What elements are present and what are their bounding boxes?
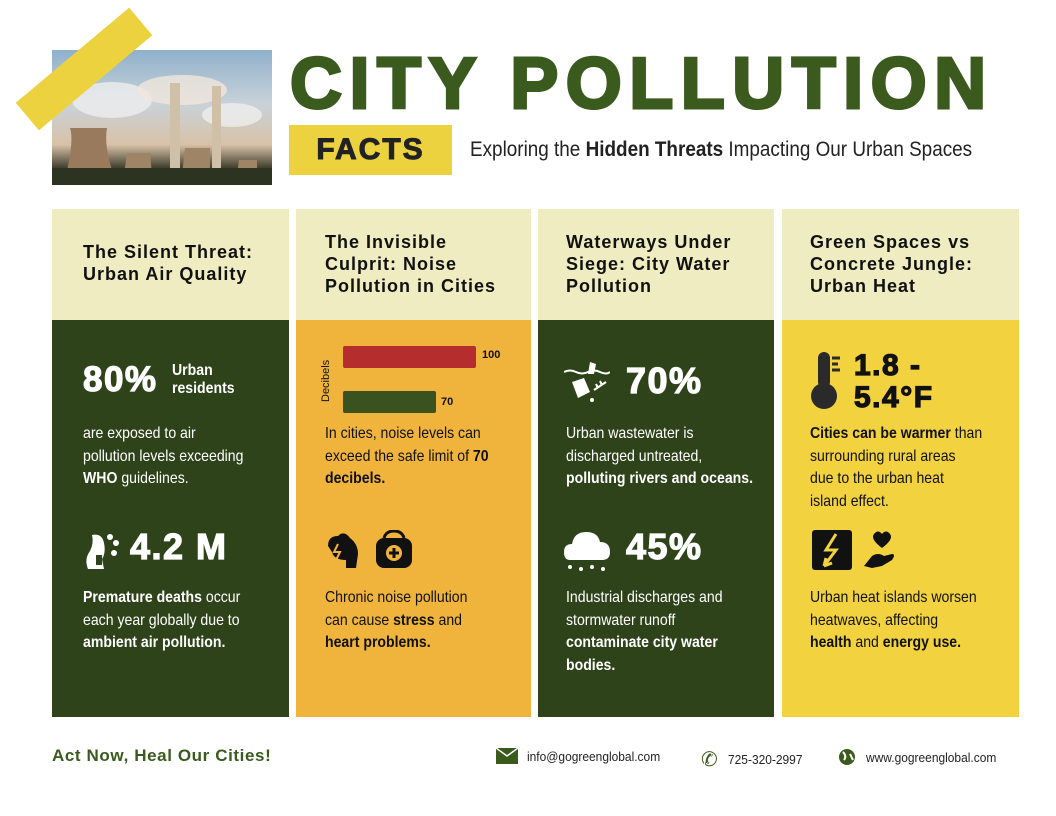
panel: water: polluting rivers and oceans. xyxy=(566,470,753,487)
panel: air quality: Urban Air Quality xyxy=(83,264,247,284)
photo: power plant xyxy=(52,50,272,185)
panel: heat: health and energy use. xyxy=(810,634,961,651)
panel: heat: surrounding rural areas xyxy=(810,448,956,464)
bar chart: Decibels xyxy=(320,360,332,402)
panel: water xyxy=(538,209,774,717)
panel: noise: Chronic noise pollution can cause stress and heart problems. xyxy=(325,589,467,651)
footer: email: info@gogreenglobal.com xyxy=(527,748,660,764)
text: are exposed to air pollution levels exceeding WHO guidelines. xyxy=(83,425,243,487)
panel: heat: Urban Heat xyxy=(810,276,916,296)
stat 80%: residents xyxy=(172,380,234,397)
panel: water: Industrial discharges and stormwater runoff contaminate city water bodies. xyxy=(566,589,723,674)
stat 80% xyxy=(83,360,234,399)
panel: heat: island effect. xyxy=(810,492,889,510)
panel: heat: Urban heat islands worsen xyxy=(810,589,977,606)
panel: noise: Culprit: Noise xyxy=(325,254,457,274)
bar chart: 100 xyxy=(482,349,500,361)
footer: phone xyxy=(701,749,802,771)
icons: stress head, medical bag xyxy=(328,530,412,568)
stat 45%: 45% xyxy=(626,526,703,567)
panel: air quality: The Silent Threat: xyxy=(83,242,253,262)
panel: noise: Pollution in Cities xyxy=(325,276,496,296)
stat 70%: 70% xyxy=(626,360,703,401)
panel: heat: Green Spaces vs xyxy=(810,232,970,252)
decorative tape xyxy=(16,8,152,130)
icon: polluted water xyxy=(564,362,610,402)
stat 80%: 80% xyxy=(83,360,158,399)
panel: heat: due to the urban heat xyxy=(810,470,944,487)
icon: thermometer xyxy=(811,352,840,409)
panel: heat xyxy=(782,209,1019,717)
footer: phone: 725-320-2997 xyxy=(728,752,802,767)
panel: water: discharged untreated, xyxy=(566,448,702,464)
stat 1.8-5.4°F: 1.8 - xyxy=(854,349,922,382)
stat 1.8-5.4°F xyxy=(854,349,934,414)
icon: rain cloud xyxy=(564,532,610,571)
footer: phone: ✆ xyxy=(701,749,718,771)
panel: air quality xyxy=(52,209,289,717)
panel: heat: Concrete Jungle: xyxy=(810,254,973,274)
footer: call to action: Act Now, Heal Our Cities! xyxy=(52,746,271,765)
icons: energy, care xyxy=(812,530,894,570)
panel: air quality: Premature deaths occur each year globally due to ambient air pollution. xyxy=(83,589,240,651)
panel: heat: Cities can be warmer than xyxy=(810,425,982,442)
panel: noise xyxy=(296,209,531,717)
FACTS label: FACTS xyxy=(316,133,425,166)
panel: heat: heatwaves, affecting xyxy=(810,612,938,628)
subtitle: Exploring the Hidden Threats Impacting Our Urban Spaces xyxy=(470,138,972,161)
panel: water: Pollution xyxy=(566,276,652,296)
FACTS label xyxy=(289,125,452,175)
panel: noise: The Invisible xyxy=(325,232,447,252)
bar chart: 70 xyxy=(441,396,453,408)
panel: water: Siege: City Water xyxy=(566,254,730,274)
stat 80%: Urban xyxy=(172,362,212,379)
stat 1.8-5.4°F: 5.4°F xyxy=(854,381,934,414)
panel: water: Waterways Under xyxy=(566,232,731,252)
bar chart xyxy=(320,346,500,413)
stat 4.2 M: 4.2 M xyxy=(130,526,228,567)
footer: website: www.gogreenglobal.com xyxy=(866,750,996,764)
icon: lungs person xyxy=(86,534,119,569)
panel: noise: In cities, noise levels can exceed the safe limit of 70 decibels. xyxy=(325,425,489,487)
panel: water: Urban wastewater is xyxy=(566,425,694,442)
title: CITY POLLUTION xyxy=(290,44,994,124)
